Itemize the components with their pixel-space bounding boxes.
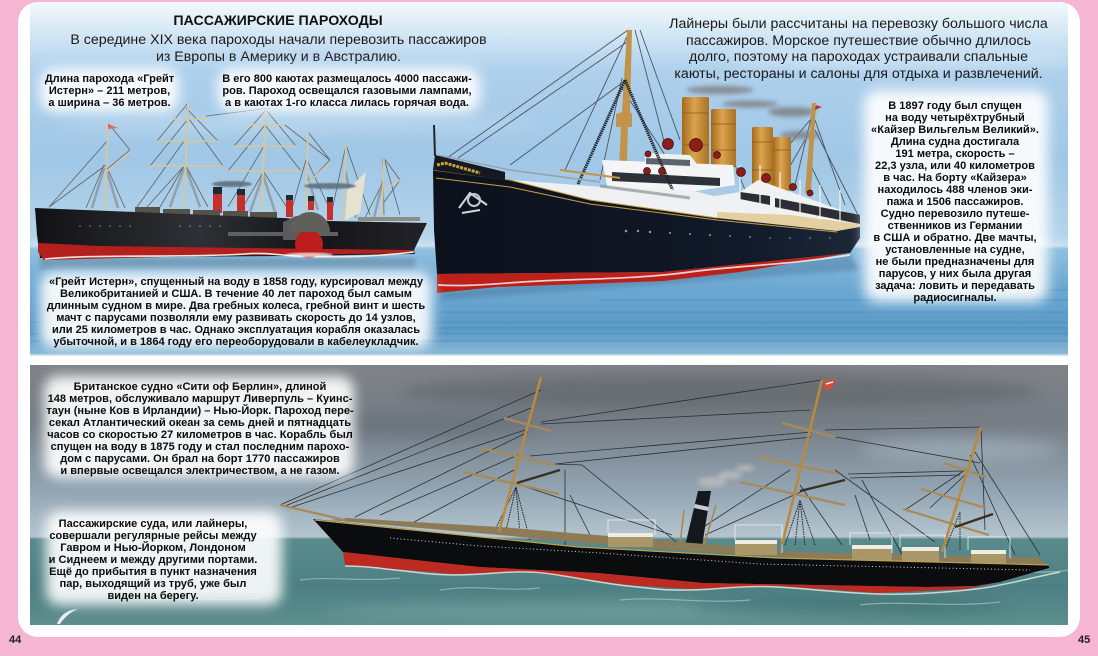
- callout: Great Eastern history: «Грейт Истерн», спущенный на воду в 1858 году, курсировал между: [49, 276, 423, 288]
- callout: Great Eastern cabins: [218, 68, 480, 112]
- callout: Kaiser Wilhelm: 191 метра, скорость –: [895, 148, 1015, 160]
- page number right: 45: [1078, 634, 1090, 646]
- callout: Kaiser Wilhelm: задача: ловить и передавать: [875, 280, 1035, 292]
- callout: City of Berlin: Британское судно «Сити оф Берлин», длиной: [74, 381, 326, 393]
- sky and sea panel: [30, 0, 1070, 356]
- cloudy sky and sea panel: [30, 365, 1068, 625]
- title: ПАССАЖИРСКИЕ ПАРОХОДЫ: [173, 13, 383, 29]
- callout: Great Eastern size: Истерн» – 211 метров,: [49, 85, 170, 97]
- callout: liners: Гавром и Нью-Йорком, Лондоном: [60, 542, 246, 554]
- callout: liners: и Сиднеем и между другими портами.: [49, 554, 257, 566]
- callout: Kaiser Wilhelm: Длина судна достигала: [891, 136, 1019, 148]
- callout: City of Berlin: дом с парусами. Он брал на борт 1770 пассажиров: [60, 453, 340, 465]
- callout: Kaiser Wilhelm: «Кайзер Вильгельм Великий».: [871, 124, 1039, 136]
- callout: Kaiser Wilhelm: [864, 90, 1048, 302]
- callout: Great Eastern history: убыточной, и в 1864 году его переоборудовали в кабелеукладчик.: [53, 336, 419, 348]
- callout: Great Eastern size: а ширина – 36 метров.: [48, 97, 171, 109]
- callout: Kaiser Wilhelm: находилось 488 членов эки-: [878, 184, 1032, 196]
- callout: Kaiser Wilhelm: парусов, у них была другая: [879, 268, 1031, 280]
- right intro text: пассажиров. Морское путешествие обычно длилось: [686, 32, 1031, 48]
- callout: liners: Пассажирские суда, или лайнеры,: [59, 518, 247, 530]
- callout: Great Eastern cabins: В его 800 каютах размещалось 4000 пассажи-: [222, 73, 472, 85]
- soft white band between panels: [18, 355, 1080, 363]
- callout: Kaiser Wilhelm: на воду четырёхтрубный: [885, 112, 1025, 124]
- callout: Great Eastern history: или 25 километров в час. Однако эксплуатация корабля оказалась: [52, 324, 420, 336]
- callout: Great Eastern history: длинным судном в мире. Два гребных колеса, гребной винт и шесть: [47, 300, 425, 312]
- intro text: [70, 32, 487, 64]
- callout: City of Berlin: таун (ныне Ков в Ирландии) – Нью-Йорк. Пароход пере-: [46, 405, 354, 417]
- callout: City of Berlin: спущен на воду в 1875 году и стал последним парохо-: [51, 441, 349, 453]
- callout: Kaiser Wilhelm: в США и обратно. Две мачты,: [873, 232, 1037, 244]
- callout: Kaiser Wilhelm: В 1897 году был спущен: [888, 100, 1022, 112]
- callout: Kaiser Wilhelm: установленные на судне,: [885, 244, 1025, 256]
- ship: City of Berlin: [280, 377, 1060, 594]
- callout: liners: совершали регулярные рейсы между: [49, 530, 257, 542]
- callout: Kaiser Wilhelm: ственников из Германии: [888, 220, 1022, 232]
- callout: Great Eastern size: Длина парохода «Грейт: [45, 73, 174, 85]
- callout: Kaiser Wilhelm: не были предназначены для: [876, 256, 1034, 268]
- callout: Great Eastern cabins: ров. Пароход освещался газовыми лампами,: [222, 85, 472, 97]
- callout: Kaiser Wilhelm: радиосигналы.: [913, 292, 997, 304]
- callout: City of Berlin: и впервые освещался электричеством, а не газом.: [60, 465, 340, 477]
- callout: Kaiser Wilhelm: пажа и 1506 пассажиров.: [887, 196, 1023, 208]
- callout: City of Berlin: [44, 376, 354, 478]
- callout: Great Eastern history: [40, 272, 432, 348]
- callout: Great Eastern history: Великобританией и США. В течение 40 лет пароход был самым: [60, 288, 412, 300]
- right intro text: Лайнеры были рассчитаны на перевозку большого числа: [669, 16, 1048, 32]
- callout: Great Eastern size: [40, 68, 179, 112]
- callout: liners: [46, 511, 282, 605]
- callout: liners: Ещё до прибытия в пункт назначения: [49, 566, 257, 578]
- callout: Great Eastern history: мачт с парусами позволяли ему развивать скорость до 14 узлов,: [56, 312, 416, 324]
- callout: City of Berlin: секал Атлантический океан за семь дней и пятнадцать: [49, 417, 351, 429]
- callout: Kaiser Wilhelm: в час. На борту «Кайзера»: [883, 172, 1027, 184]
- callout: City of Berlin: часов со скоростью 27 километров в час. Корабль был: [47, 429, 353, 441]
- callout: liners: виден на берегу.: [107, 590, 199, 602]
- page number left: 44: [9, 634, 21, 646]
- right intro text: долго, поэтому на пароходах устраивали спальные: [689, 49, 1028, 65]
- ship: Great Eastern: [35, 103, 427, 270]
- right intro text: [669, 16, 1048, 82]
- intro text: из Европы в Америку и в Австралию.: [156, 48, 401, 64]
- callout: liners: пар, выходящий из труб, уже был: [60, 578, 246, 590]
- callout: City of Berlin: 148 метров, обслуживало маршрут Ливерпуль – Куинс-: [48, 393, 352, 405]
- right intro text: каюты, рестораны и салоны для отдыха и развлечений.: [674, 66, 1043, 82]
- callout: Kaiser Wilhelm: 22,3 узла, или 40 километров: [875, 160, 1035, 172]
- ship: Kaiser Wilhelm der Grosse: [433, 30, 860, 300]
- callout: Kaiser Wilhelm: Судно перевозило путеше-: [881, 208, 1029, 220]
- callout: Great Eastern cabins: а в каютах 1-го класса лилась горячая вода.: [225, 97, 469, 109]
- intro text: В середине XIX века пароходы начали перевозить пассажиров: [70, 32, 487, 48]
